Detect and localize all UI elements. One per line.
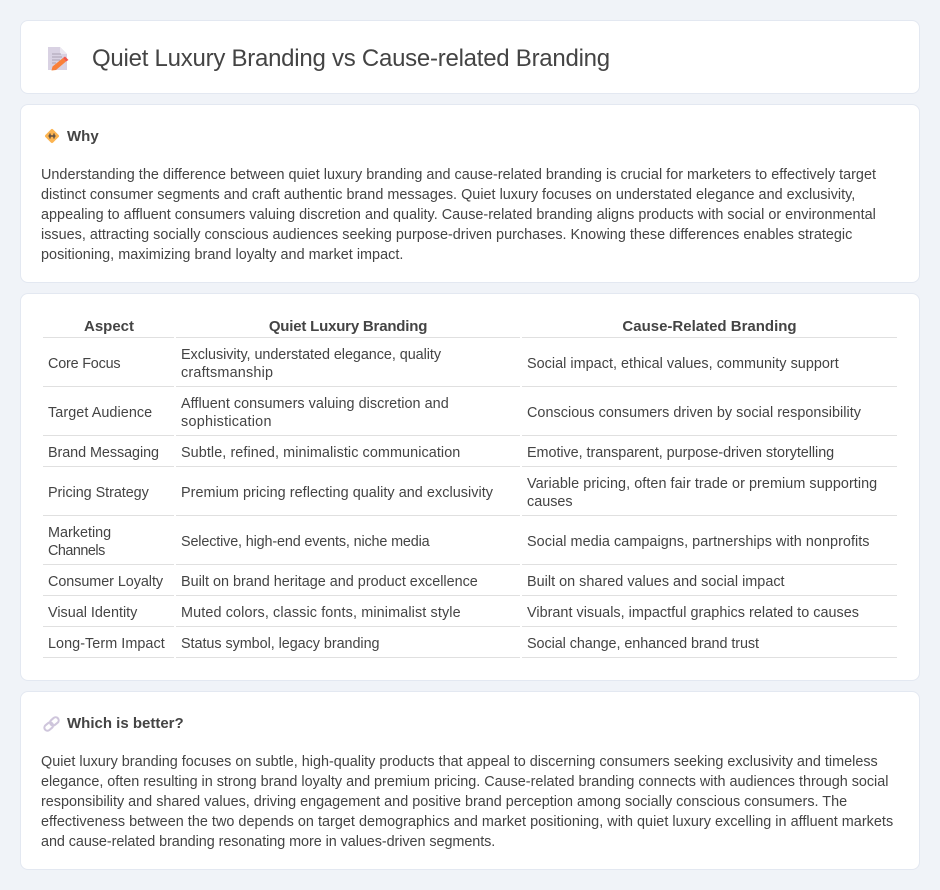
panel: title header (20, 20, 920, 94)
row: brand messaging: Emotive, transparent, purpose-driven storytelling (527, 445, 834, 461)
text block: why paragraph: distinct consumer segments and craft authentic brand messages. Quiet luxury focuses on understated elegance and exclusivity, (41, 187, 855, 203)
row: long-term impact: Social change, enhanced brand trust (527, 636, 759, 652)
heading: why: Why (67, 128, 99, 145)
row: marketing channels: Social media campaigns, partnerships with nonprofits (527, 534, 870, 550)
row: marketing channels: Selective, high-end events, niche media (181, 534, 430, 550)
icon: chain link (43, 716, 60, 732)
table header: Aspect (84, 318, 134, 335)
heading: which is better: Which is better? (67, 715, 184, 732)
text block: which is better paragraph: and cause-related branding resonating more in values-driven segments. (41, 834, 495, 850)
row: core focus: craftsmanship (181, 365, 273, 381)
row: core focus: Exclusivity, understated elegance, quality (181, 347, 441, 363)
row: long-term impact: Status symbol, legacy branding (181, 636, 379, 652)
row: visual identity: Vibrant visuals, impactful graphics related to causes (527, 605, 859, 621)
text block: why paragraph: issues, attracting socially conscious audiences seeking purpose-driven purchases. Knowing these differences enables strategic (41, 227, 852, 243)
icon: diamond sign (45, 128, 59, 144)
row: target audience: Conscious consumers driven by social responsibility (527, 405, 861, 421)
text block: which is better paragraph: Quiet luxury branding focuses on subtle, high-quality products that appeal to discerning consumers seeking exclusivity and timeless (41, 754, 878, 770)
panel: which is better (20, 691, 920, 870)
row: brand messaging: Subtle, refined, minimalistic communication (181, 445, 460, 461)
title: Quiet Luxury Branding vs Cause-related Branding (92, 45, 610, 72)
row: target audience: Target Audience (48, 405, 152, 421)
text block: why paragraph: appealing to affluent consumers valuing discretion and quality. Cause-related branding aligns products with social or environmental (41, 207, 876, 223)
text block: which is better paragraph: elegance, often resulting in strong brand loyalty and premium pricing. Cause-related branding connects with audiences through social (41, 774, 888, 790)
text block: which is better paragraph: responsibility and shared values, driving engagement and positive brand perception among socially conscious consumers. The (41, 794, 847, 810)
row: pricing strategy: causes (527, 494, 573, 510)
row: core focus: Core Focus (48, 356, 120, 372)
text block: why paragraph: positioning, maximizing brand loyalty and market impact. (41, 247, 403, 263)
row: pricing strategy: Pricing Strategy (48, 485, 149, 501)
text block: why paragraph: Understanding the difference between quiet luxury branding and cause-related branding is crucial for marketers to effectively target (41, 167, 876, 183)
row: consumer loyalty: Built on shared values and social impact (527, 574, 785, 590)
panel: why (20, 104, 920, 283)
text block: which is better paragraph: effectiveness between the two depends on target demographics and market positioning, with quiet luxury excelling in affluent markets (41, 814, 893, 830)
row: consumer loyalty: Built on brand heritage and product excellence (181, 574, 478, 590)
row: core focus: Social impact, ethical values, community support (527, 356, 839, 372)
row: marketing channels: Marketing (48, 525, 111, 541)
row: brand messaging: Brand Messaging (48, 445, 159, 461)
row: target audience: Affluent consumers valuing discretion and (181, 396, 449, 412)
row: long-term impact: Long-Term Impact (48, 636, 165, 652)
row: target audience: sophistication (181, 414, 272, 430)
row: marketing channels: Channels (48, 543, 105, 559)
panel: comparison table (20, 293, 920, 681)
table header: Cause-Related Branding (622, 318, 797, 335)
row: visual identity: Visual Identity (48, 605, 137, 621)
row: consumer loyalty: Consumer Loyalty (48, 574, 163, 590)
row: visual identity: Muted colors, classic fonts, minimalist style (181, 605, 461, 621)
row: pricing strategy: Variable pricing, often fair trade or premium supporting (527, 476, 877, 492)
row: pricing strategy: Premium pricing reflecting quality and exclusivity (181, 485, 493, 501)
table header: Quiet Luxury Branding (269, 318, 427, 335)
icon: document with pencil (48, 47, 68, 70)
